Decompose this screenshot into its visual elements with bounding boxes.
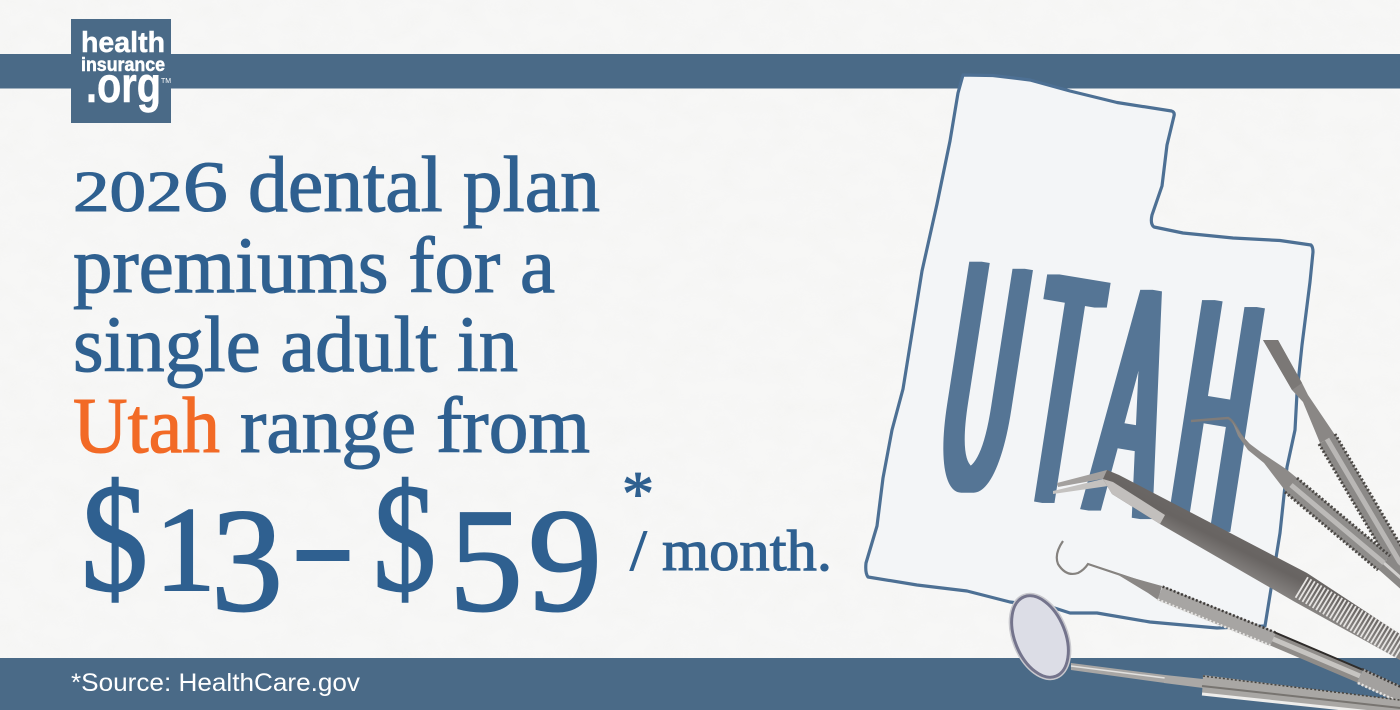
price range: 3 [211, 479, 283, 643]
state outline of Utah [866, 75, 1313, 628]
icon: dental spatula [1263, 340, 1400, 588]
per month label: / month. [630, 518, 832, 583]
icon: dental hook probe [1057, 541, 1400, 706]
price range: 9 [528, 479, 602, 643]
heading: Utah [73, 383, 220, 470]
logo: health [81, 27, 165, 59]
icon: dental mirror [998, 584, 1400, 710]
price range: 5 [449, 479, 523, 643]
icon: tweezers [1053, 470, 1400, 660]
state name UTAH: UTAH [923, 191, 1277, 603]
source note: *Source: HealthCare.gov [71, 669, 361, 697]
logo: .org [86, 57, 161, 113]
top band [0, 54, 1400, 88]
icon: dental explorer [1191, 418, 1400, 586]
asterisk: * [622, 458, 654, 529]
price range [81, 452, 602, 643]
heading: dental plan [248, 142, 600, 229]
heading: range from [240, 383, 590, 470]
price range: $ [373, 452, 436, 624]
heading: single adult in [73, 302, 518, 389]
heading: premiums for a [73, 223, 555, 310]
heading [73, 142, 600, 470]
price range: 1 [155, 483, 216, 617]
logo: insurance [81, 55, 165, 76]
logo [71, 19, 171, 123]
price range: – [299, 490, 347, 601]
price range: $ [81, 452, 148, 624]
logo: TM [161, 78, 171, 85]
heading: 202 6 [73, 147, 228, 227]
footer band [0, 658, 1400, 710]
